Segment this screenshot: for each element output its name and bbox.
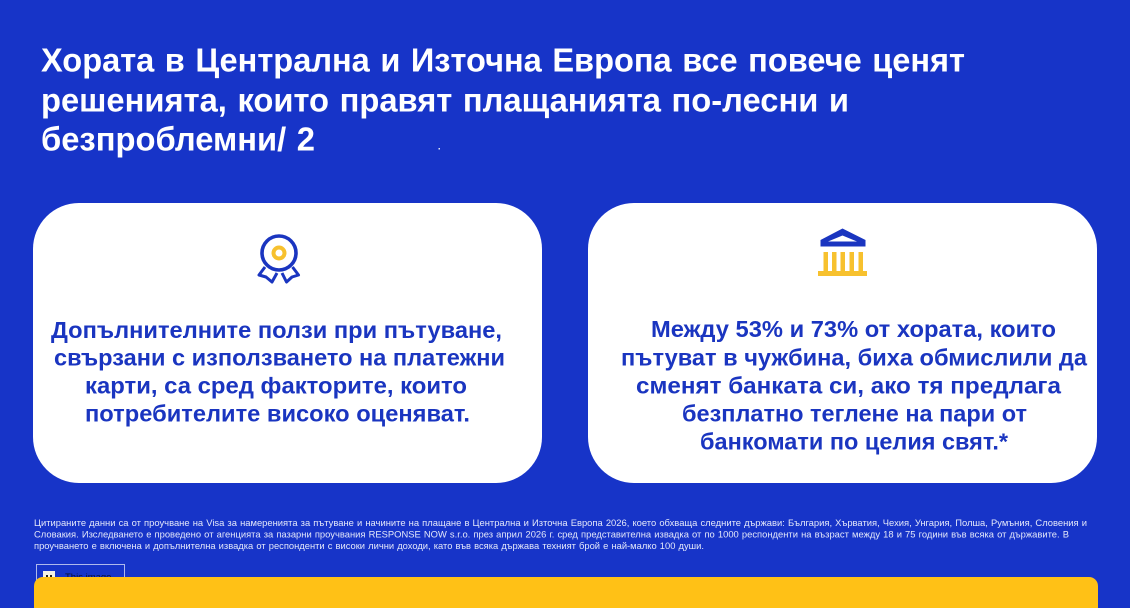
panel text: карти, са сред факторите, които (85, 372, 467, 398)
footnote: Словакия. Изследването е проведено от агенцията за пазарни проучвания RESPONSE NOW s.r.o. през април 2026 г. сред представителна извадка от по 1000 респонденти на възраст между 18 и 75 години във всяка от държавите. В (34, 530, 1069, 540)
panel: travel benefits (33, 203, 542, 483)
broken image placeholder: This image (65, 572, 111, 583)
yellow footer bar (34, 577, 1098, 608)
panel: ATM withdrawals (588, 203, 1097, 483)
broken image placeholder (36, 564, 124, 594)
panel text (51, 317, 505, 426)
panel text: свързани с използването на платежни (54, 344, 505, 370)
panel text: пътуват в чужбина, биха обмислили да (621, 344, 1088, 370)
stray dot (438, 148, 440, 150)
title: Хората в Централна и Източна Европа все повече ценят (41, 42, 965, 78)
title (41, 42, 965, 158)
panel text: потребителите високо оценяват. (85, 400, 470, 426)
panel text: безплатно теглене на пари от (682, 400, 1027, 426)
footnote: Цитираните данни са от проучване на Visa за намеренията за пътуване и начините на плащане в Централна и Източна Европа 2026, което обхваща следните държави: България, Хърватия, Чехия, Унгария, Полша, Румъния, Словения и (34, 518, 1087, 528)
icon: bank building (818, 228, 867, 276)
panel text: Между 53% и 73% от хората, които (651, 316, 1056, 342)
panel text (621, 316, 1088, 454)
footnote: проучването е включена и допълнителна извадка от респонденти с високи лични доходи, като във всяка държава техният брой е най-малко 100 души. (34, 541, 704, 551)
panel text: Допълнителните ползи при пътуване, (51, 317, 502, 343)
icon: award rosette (259, 236, 298, 282)
footnote (34, 518, 1087, 551)
panel text: банкомати по целия свят.* (700, 428, 1009, 454)
panel text: сменят банката си, ако тя предлага (636, 372, 1062, 398)
title: решенията, които правят плащанията по-лесни и (41, 82, 849, 118)
title: безпроблемни/ 2 (41, 120, 315, 158)
